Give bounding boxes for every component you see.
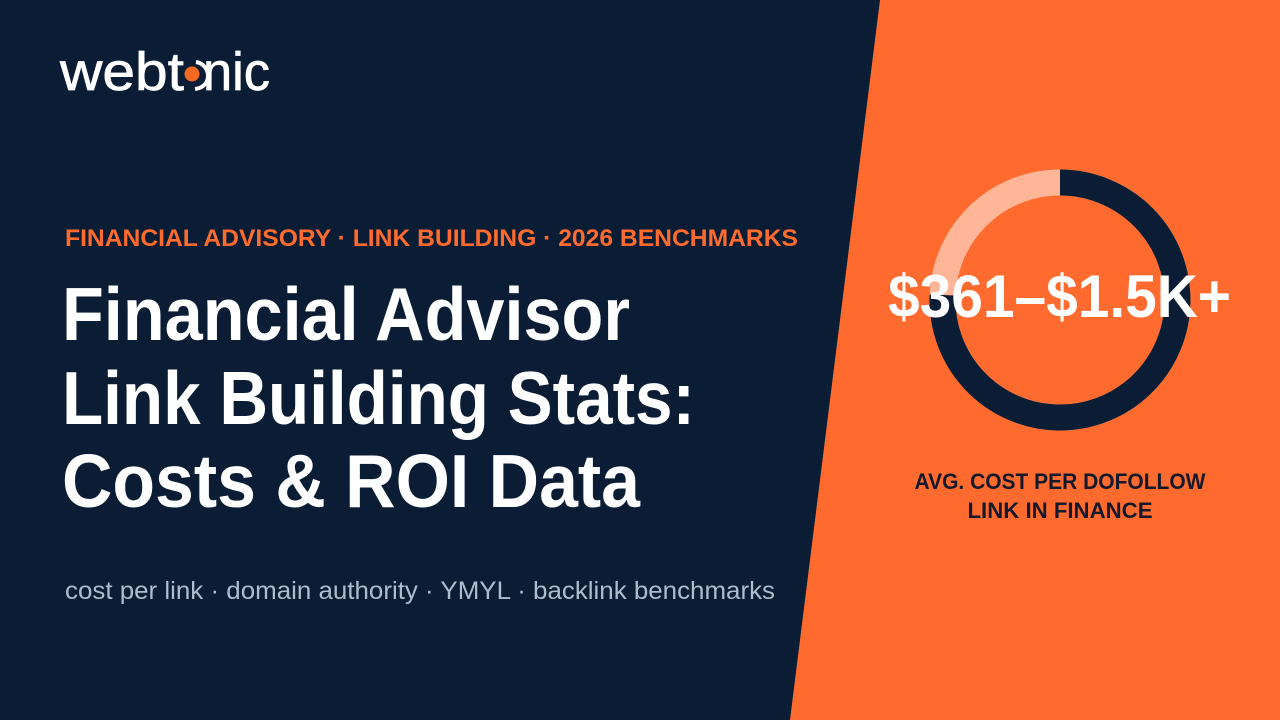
- donut chart: [942, 182, 1178, 418]
- title line 3: Costs & ROI Data: [62, 439, 641, 523]
- panel: orange slanted stat panel: [790, 0, 1280, 720]
- title: [62, 272, 695, 523]
- big stat value: $361–$1.5K+: [888, 263, 1231, 330]
- stat label: [914, 469, 1206, 523]
- stat label line 1: AVG. COST PER DOFOLLOW: [914, 469, 1206, 494]
- subtitle keywords: cost per link · domain authority · YMYL · backlink benchmarks: [65, 577, 775, 605]
- title line 2: Link Building Stats:: [62, 356, 695, 440]
- logo: webtonic: webt: [59, 42, 184, 102]
- stat label line 2: LINK IN FINANCE: [968, 498, 1152, 523]
- logo: webtonic: nic: [203, 42, 270, 102]
- title line 1: Financial Advisor: [62, 272, 630, 356]
- eyebrow text: FINANCIAL ADVISORY · LINK BUILDING · 2026 BENCHMARKS: [65, 225, 798, 252]
- donut: light remainder arc: [942, 182, 1178, 418]
- logo: webtonic: [59, 42, 270, 102]
- donut: navy value arc: [942, 182, 1177, 417]
